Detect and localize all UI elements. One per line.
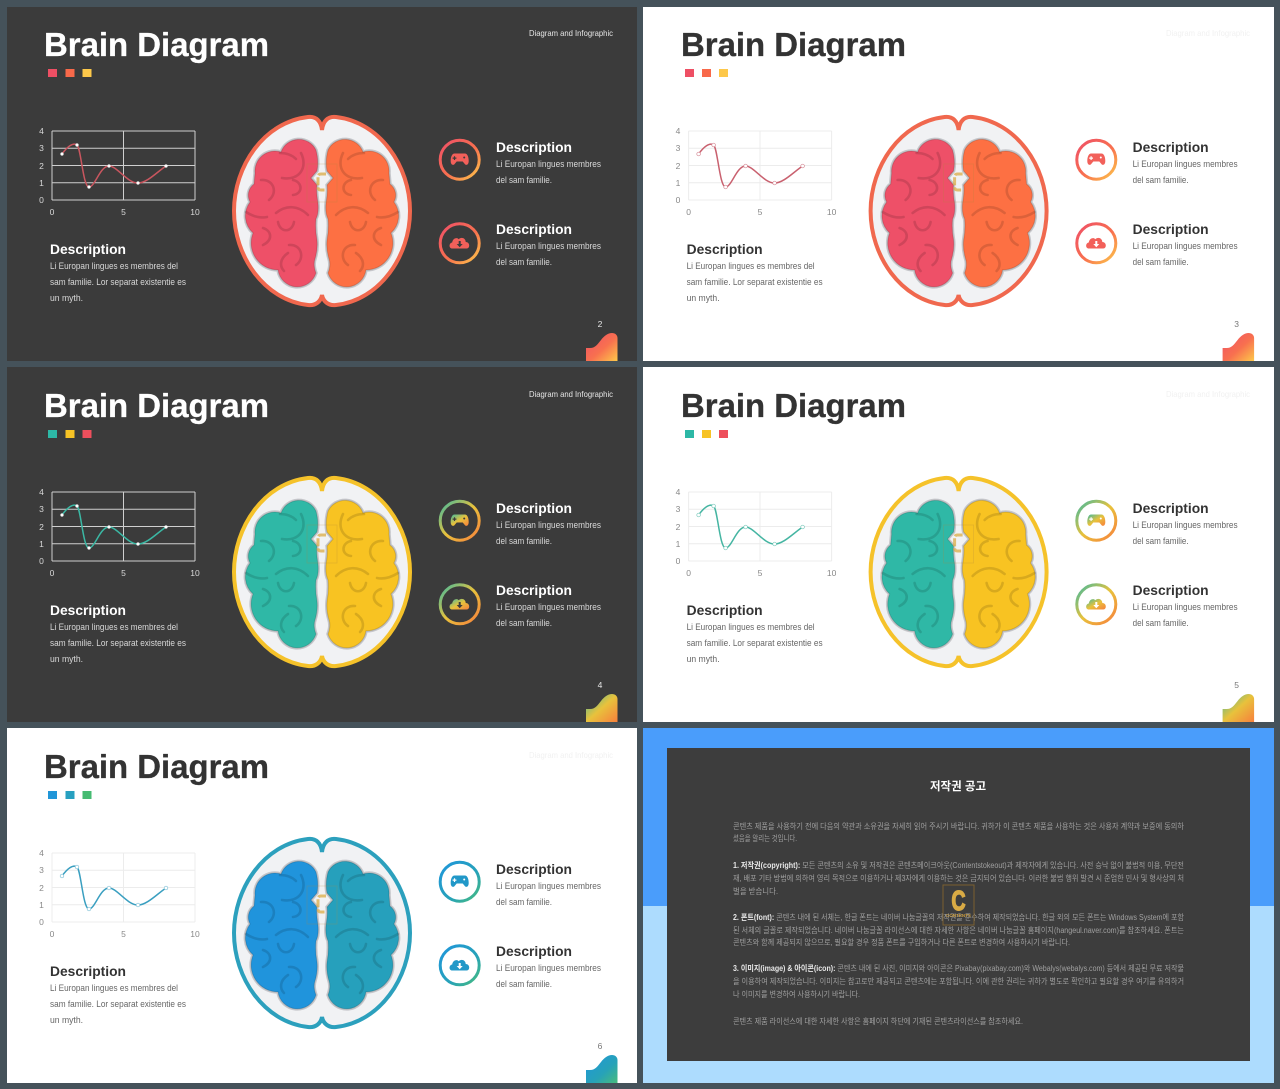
slide 3 description bottom: del sam familie. [496, 618, 552, 629]
gold logo watermark: CONTENTS [946, 913, 971, 918]
slide 1 panel [7, 7, 637, 361]
slide 4 description bottom: Description [1133, 582, 1209, 598]
slide 3 description top [496, 500, 601, 547]
gold logo watermark: C [952, 885, 966, 916]
slide 1 colour squares [48, 69, 92, 77]
slide 4 corner tab [1223, 694, 1254, 722]
slide 5 colour squares [48, 791, 92, 799]
slide 3 line chart: 4 [39, 487, 44, 497]
slide 4 line chart: 0 [686, 568, 691, 578]
notice intro paragraph: 콘텐츠 제품을 사용하기 전에 다음의 약관과 소유권을 자세히 읽어 주시기 바랍니다. 귀하가 이 콘텐츠 제품을 사용하는 것은 사용자 계약과 보증에 동의하 [733, 821, 1185, 831]
slide 3 description top: Description [496, 500, 572, 516]
slide 2 icon: game controller [1077, 140, 1116, 179]
slide 1 line chart: 4 [39, 126, 44, 136]
slide 2 description bottom: Li Europan lingues membres [1133, 241, 1238, 252]
slide 5 line chart: 1 [39, 900, 44, 910]
slide 5 line chart: 4 [39, 848, 44, 858]
slide 4 description top: Li Europan lingues membres [1133, 520, 1238, 531]
slide 3: dark teal/yellow brain diagram [7, 367, 637, 722]
notice section 2: font: 2. 폰트(font): 콘텐츠 내에 된 서체는, 한글 폰트는 네이버 나눔글꼴의 저작권을 준수하여 제작되었습니다. 한글 외의 모든 폰트는 Windows System에 포함 [733, 912, 1185, 922]
slide 2 left description [687, 241, 823, 304]
notice section 1: copyright: 재, 배포 기타 방법에 의하여 영리 목적으로 이용하거나 제3자에게 이용하는 것은 금지되어 있습니다. 이러한 불법 행위 발견 시 준엄한 민사 및 형사상의 처 [733, 873, 1184, 883]
slide 1 icon: game controller [440, 140, 479, 179]
slide 4 panel [643, 367, 1274, 722]
slide 2 line chart: 0 [676, 195, 681, 205]
slide 4 colour squares [685, 430, 728, 438]
slide 1 subtitle: Diagram and Infographic [529, 28, 614, 38]
notice section 2: font: 콘텐츠와 함께 제공되지 않으므로, 필요할 경우 정품 폰트를 구입하거나 다른 폰트로 변경하여 사용하시기 바랍니다. [733, 937, 1070, 947]
slide 5 description bottom: Description [496, 943, 572, 959]
slide 3 description bottom: Li Europan lingues membres [496, 602, 601, 613]
slide 5 left description: Description [50, 963, 126, 979]
slide 1 description top [496, 139, 601, 186]
slide 2 title: Brain Diagram [681, 26, 906, 63]
slide 4 page number: 5 [1234, 680, 1239, 690]
slide 4 icon: game controller [1077, 501, 1116, 540]
notice background top band [643, 728, 1274, 906]
slide 4 line chart: 2 [676, 522, 681, 532]
slide 4 title: Brain Diagram [681, 387, 906, 424]
slide 5 line chart [39, 848, 200, 939]
slide 5 line chart: 2 [39, 883, 44, 893]
slide 4 line chart: 5 [758, 568, 763, 578]
slide 1 corner tab [586, 333, 618, 361]
slide 5 description top: Li Europan lingues membres [496, 881, 601, 892]
slide 5 description top [496, 861, 601, 908]
slide 4 description bottom: Li Europan lingues membres [1133, 602, 1238, 613]
slide 3 description bottom: Description [496, 582, 572, 598]
slide 3 left description: Li Europan lingues es membres del [50, 622, 178, 633]
slide 3 line chart: 0 [50, 568, 55, 578]
slide 1 line chart: 5 [121, 207, 126, 217]
slide 1 description top: Li Europan lingues membres [496, 159, 601, 170]
slide 1 line chart: 10 [190, 207, 200, 217]
slide 5 description top: Description [496, 861, 572, 877]
slide 5 brain [234, 839, 410, 1027]
notice dark panel [667, 748, 1250, 1061]
slide 1 brain [234, 117, 410, 305]
slide 5 line chart: 0 [50, 929, 55, 939]
slide 2 line chart: 3 [676, 143, 681, 153]
slide 3 line chart: 1 [39, 539, 44, 549]
slide 4 brain [871, 478, 1047, 666]
slide 2 icon: cloud download [1077, 224, 1116, 263]
slide 2 line chart: 2 [676, 161, 681, 171]
slide 2 description bottom [1133, 221, 1238, 268]
slide 2 colour squares [685, 69, 728, 77]
slide 3 left description: sam familie. Lor separat existentie es [50, 638, 186, 649]
slide 2 line chart: 4 [676, 126, 681, 136]
slide 3 line chart: 5 [121, 568, 126, 578]
slide 1 line chart: 3 [39, 143, 44, 153]
notice background bottom band [643, 906, 1274, 1083]
slide 3 description top: del sam familie. [496, 536, 552, 547]
slide 1 left description: Description [50, 241, 126, 257]
slide 4 left description [687, 602, 823, 665]
notice section 1: copyright: 1. 저작권(copyright): 모든 콘텐츠의 소유 및 저작권은 콘텐츠메이크아웃(Contentstokeout)과 제작자에게 있습니다. 사전 승낙 없이 불법적 이용, 무단전 [733, 860, 1184, 870]
slide 1 line chart: 2 [39, 161, 44, 171]
slide 4 line chart: 0 [676, 556, 681, 566]
slide 1 left description: Li Europan lingues es membres del [50, 261, 178, 272]
slide 5 description bottom: Li Europan lingues membres [496, 963, 601, 974]
notice heading: 저작권 공고 [930, 779, 986, 793]
slide 4 left description: Li Europan lingues es membres del [687, 622, 815, 633]
slide 1 description bottom [496, 221, 601, 268]
slide 5 description top: del sam familie. [496, 897, 552, 908]
slide 4 line chart [676, 487, 837, 578]
notice intro paragraph [733, 821, 1185, 843]
slide 2 line chart: 0 [686, 207, 691, 217]
slide 2 description bottom: Description [1133, 221, 1209, 237]
slide 5 icon: game controller [440, 862, 479, 901]
notice section 2: font [733, 912, 1185, 947]
slide 4: light teal/yellow brain diagram [643, 367, 1274, 722]
slide 1 left description: un myth. [50, 293, 83, 304]
slide 2 subtitle: Diagram and Infographic [1166, 28, 1251, 38]
gold logo watermark [943, 885, 974, 925]
slide 5 corner tab [586, 1055, 618, 1083]
slide 2 description top [1133, 139, 1238, 186]
slide 5 icon: cloud download [440, 946, 479, 985]
slide 4 left description: sam familie. Lor separat existentie es [687, 638, 823, 649]
slide 4 subtitle: Diagram and Infographic [1166, 389, 1251, 399]
slide 1: dark red/orange brain diagram [7, 7, 637, 361]
slide 3 description top: Li Europan lingues membres [496, 520, 601, 531]
slide 2 brain [871, 117, 1047, 305]
slide 1 left description: sam familie. Lor separat existentie es [50, 277, 186, 288]
slide 1 page number: 2 [598, 319, 603, 329]
slide 3 left description: Description [50, 602, 126, 618]
slide 5 line chart: 10 [190, 929, 200, 939]
slide 3 left description [50, 602, 186, 665]
slide 4 line chart: 3 [676, 504, 681, 514]
slide 6: copyright notice [643, 728, 1274, 1083]
slide 5 line chart: 5 [121, 929, 126, 939]
slide 1 line chart: 1 [39, 178, 44, 188]
slide 3 description bottom [496, 582, 601, 629]
slide 5 left description [50, 963, 186, 1026]
slide 3 panel [7, 367, 637, 722]
slide 1 description bottom: del sam familie. [496, 257, 552, 268]
slide 4 description top: del sam familie. [1133, 536, 1189, 547]
slide 5 line chart: 3 [39, 865, 44, 875]
slide 2 corner tab [1223, 333, 1254, 361]
slide 3 colour squares [48, 430, 92, 438]
slide 3 icon: game controller [440, 501, 479, 540]
slide 3 subtitle: Diagram and Infographic [529, 389, 614, 399]
slide 3 line chart [39, 487, 200, 578]
slide 5 title: Brain Diagram [44, 748, 269, 785]
slide 3 title: Brain Diagram [44, 387, 269, 424]
notice intro paragraph: 셨음을 알리는 것입니다. [733, 833, 797, 843]
slide 2 left description: Description [687, 241, 763, 257]
slide 3 line chart: 0 [39, 556, 44, 566]
slide 2 description top: Description [1133, 139, 1209, 155]
slide 2 left description: Li Europan lingues es membres del [687, 261, 815, 272]
notice section 3: image and icon: 나 이미지를 변경하여 사용하시기 바랍니다. [733, 989, 860, 999]
slide 2 line chart: 1 [676, 178, 681, 188]
slide 5 line chart: 0 [39, 917, 44, 927]
slide 5 subtitle: Diagram and Infographic [529, 750, 614, 760]
slide 5: light blue brain diagram [7, 728, 637, 1083]
slide 4 description top [1133, 500, 1238, 547]
notice section 2: font: 된 서체의 글꼴로 제작되었습니다. 네이버 나눔글꼴 라이선스에 대한 자세한 사항은 네이버 나눔글꼴 홈페이지(hangeul.naver.com)를 참조하세요. 폰트는 [733, 925, 1184, 935]
slide 1 description top: Description [496, 139, 572, 155]
slide 4 icon: cloud download [1077, 585, 1116, 624]
slide 3 corner tab [586, 694, 618, 722]
notice section 3: image and icon: 3. 이미지(image) & 아이콘(icon): 콘텐츠 내에 된 사진, 이미지와 아이콘은 Pixabay(pixabay.com)와 Webalys(webalys.com) 등에서 제공된 무료 저작물 [733, 963, 1184, 973]
slide 4 description bottom [1133, 582, 1238, 629]
slide 4 line chart: 4 [676, 487, 681, 497]
slide 5 left description: un myth. [50, 1015, 83, 1026]
slide 2: light red/orange brain diagram [643, 7, 1274, 361]
slide 3 left description: un myth. [50, 654, 83, 665]
slide 2 description top: del sam familie. [1133, 175, 1189, 186]
slide 4 line chart: 10 [827, 568, 837, 578]
notice section 3: image and icon [733, 963, 1184, 999]
slide 1 description bottom: Description [496, 221, 572, 237]
slide 4 description bottom: del sam familie. [1133, 618, 1189, 629]
slide 2 line chart: 5 [758, 207, 763, 217]
slide 3 icon: cloud download [440, 585, 479, 624]
notice section 1: copyright [733, 860, 1184, 896]
notice section 3: image and icon: 을 이용하여 제작되었습니다. 이미지는 참고로만 제공되고 콘텐츠에는 포함됩니다. 이에 관한 권리는 귀하가 별도로 확인하고 필요할 경우 여기를 유의하거 [733, 976, 1184, 986]
notice closing line: 콘텐츠 제품 라이선스에 대한 자세한 사항은 홈페이지 하단에 기재된 콘텐츠라이선스를 참조하세요. [733, 1016, 1023, 1026]
slide 2 panel [643, 7, 1274, 361]
slide 4 left description: un myth. [687, 654, 720, 665]
slide 5 description bottom [496, 943, 601, 990]
slide 2 page number: 3 [1234, 319, 1239, 329]
slide 2 line chart: 10 [827, 207, 837, 217]
slide 1 description top: del sam familie. [496, 175, 552, 186]
slide 5 panel [7, 728, 637, 1083]
slide 1 description bottom: Li Europan lingues membres [496, 241, 601, 252]
slide 5 description bottom: del sam familie. [496, 979, 552, 990]
slide 3 brain [234, 478, 410, 666]
notice section 1: copyright: 벌을 받습니다. [733, 886, 778, 896]
slide 1 left description [50, 241, 186, 304]
slide 2 left description: un myth. [687, 293, 720, 304]
slide 3 line chart: 3 [39, 504, 44, 514]
slide 5 page number: 6 [598, 1041, 603, 1051]
slide 2 description bottom: del sam familie. [1133, 257, 1189, 268]
slide 3 page number: 4 [598, 680, 603, 690]
slide 3 line chart: 10 [190, 568, 200, 578]
slide 1 line chart: 0 [39, 195, 44, 205]
slide 1 line chart: 0 [50, 207, 55, 217]
slide 1 title: Brain Diagram [44, 26, 269, 63]
slide 4 left description: Description [687, 602, 763, 618]
slide 5 left description: Li Europan lingues es membres del [50, 983, 178, 994]
slide 4 line chart: 1 [676, 539, 681, 549]
slide 2 line chart [676, 126, 837, 217]
slide 3 line chart: 2 [39, 522, 44, 532]
slide 2 left description: sam familie. Lor separat existentie es [687, 277, 823, 288]
slide 5 left description: sam familie. Lor separat existentie es [50, 999, 186, 1010]
slide 4 description top: Description [1133, 500, 1209, 516]
slide 2 description top: Li Europan lingues membres [1133, 159, 1238, 170]
slide 1 line chart [39, 126, 200, 217]
slide 1 icon: cloud download [440, 224, 479, 263]
